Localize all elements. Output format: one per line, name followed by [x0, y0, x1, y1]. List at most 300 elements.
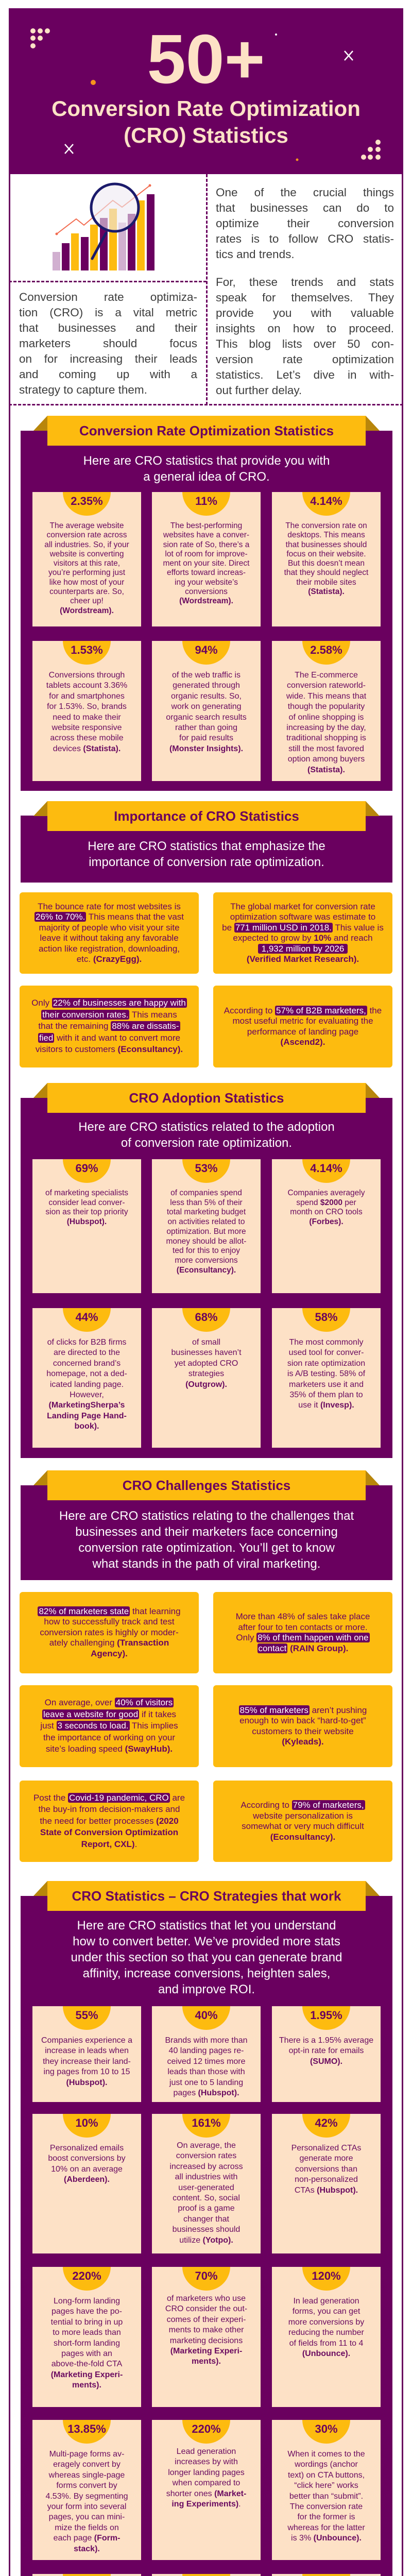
card 1.95%	[272, 2006, 381, 2102]
card 11%: lot of room for improve-	[165, 550, 248, 558]
card 82%: Agency).	[91, 1649, 128, 1658]
card 48%: after four to ten contacts or more.	[238, 1622, 368, 1632]
card 4.14%	[272, 492, 381, 626]
card 44%: homepage, not a ded-	[46, 1369, 127, 1378]
card covid: Report, CXL).	[81, 1839, 137, 1849]
card 55%: they increase their land-	[43, 2057, 131, 2066]
card 2.35%: cheer up!	[70, 597, 104, 605]
heading: Conversion Rate Optimization Statistics: Conversion Rate Optimization Statistics	[79, 423, 334, 438]
card 22% businesses: that the remaining 88% are dissatis-	[38, 1021, 179, 1031]
card 1.53%: across these mobile	[50, 734, 124, 742]
card 10%: boost conversions by	[48, 2154, 126, 2163]
card 220%: tential to bring in up	[51, 2318, 123, 2327]
card bounce rate: leave it without taking any favorable	[40, 933, 179, 943]
heading: Importance of CRO Statistics	[47, 801, 366, 831]
card 79%: website personalization is	[253, 1810, 353, 1821]
intro text right paragraph 2: version rate optimization	[216, 353, 394, 366]
card global market: optimization software was estimate to	[230, 912, 375, 922]
card 13.85%: forms convert by	[56, 2481, 117, 2490]
card 1.95%: 1.95%	[310, 2009, 342, 2022]
card 13.85%: mize the fields on	[55, 2523, 119, 2532]
card 10%: Personalized emails	[50, 2144, 124, 2153]
card 42%	[272, 2114, 381, 2253]
card 161%: proof is a game	[178, 2204, 235, 2213]
heading: CRO Adoption Statistics	[47, 1083, 366, 1113]
card 30%: 30%	[315, 2422, 338, 2435]
card 2.58%: of online shopping is	[289, 713, 364, 722]
card 220%: 220%	[192, 2422, 221, 2435]
card 1.95%: opt-in rate for emails	[289, 2046, 364, 2055]
card 11%: efforts toward increas-	[167, 568, 246, 577]
card 161%: utilize (Yotpo).	[179, 2236, 233, 2245]
card 1.95%: There is a 1.95% average	[279, 2036, 373, 2045]
card 220%: pages have the po-	[52, 2307, 122, 2316]
card 85%: customers to their website	[252, 1726, 354, 1736]
card 42%: 42%	[315, 2116, 338, 2129]
intro text right paragraph 2: statistics. Let’s dive in with-	[216, 368, 394, 381]
card 40%: leave a website for good if it takes	[43, 1709, 176, 1719]
card 58%	[272, 1308, 381, 1448]
card 58%: use it (Invesp).	[298, 1401, 354, 1410]
card 2.58%: increasing by the day,	[286, 723, 366, 732]
panel: strategies	[21, 1896, 392, 2576]
card 1.95%: (SUMO).	[310, 2057, 342, 2066]
intro text right paragraph 2: out further delay.	[216, 384, 302, 397]
card 2.35%: website is converting	[50, 550, 124, 558]
subtitle: Here are CRO statistics that provide you with	[83, 454, 330, 468]
illustration: bar chart with magnifier	[53, 182, 154, 270]
card 53%: (Econsultancy).	[177, 1266, 236, 1275]
card 120%: forms, you can get	[293, 2307, 360, 2316]
card 70%: CRO consider the out-	[165, 2304, 247, 2313]
card covid	[20, 1781, 199, 1862]
card 40%: the importance of working on your	[43, 1733, 175, 1742]
subtitle: under this section so that you can generate brand	[71, 1951, 342, 1964]
card 44%: book).	[74, 1422, 99, 1431]
card 44%: Landing Page Hand-	[47, 1412, 127, 1420]
panel: challenges	[21, 1485, 392, 1580]
subtitle: of conversion rate optimization.	[121, 1136, 292, 1150]
card 58%: is A/B testing. 58% of	[287, 1369, 365, 1378]
card 11%: (Wordstream).	[179, 597, 233, 605]
card 30%: “click here” works	[294, 2481, 358, 2490]
card 30%: better than “submit”.	[289, 2492, 363, 2501]
card global market: 1,932 million by 2026	[262, 944, 344, 953]
card 57% B2B: performance of landing page	[247, 1026, 358, 1037]
card 120%: (Unbounce).	[302, 2349, 350, 2358]
card 161%: 161%	[192, 2116, 221, 2129]
card 2.35%	[32, 492, 141, 626]
card 44%: (MarketingSherpa’s	[49, 1401, 125, 1410]
card 70%: (Marketing Experi-	[170, 2347, 242, 2355]
card 48%: Only 8% of them happen with one	[236, 1633, 369, 1642]
card 220%: increases by with	[175, 2458, 238, 2466]
card 4.14%	[272, 1159, 381, 1293]
card 4.14%: But this doesn’t mean	[288, 559, 365, 568]
card 40%: leads than those with	[167, 2067, 245, 2076]
card 13.85%: eragely convert by	[53, 2460, 121, 2469]
card 13.85%	[32, 2420, 141, 2560]
card 40%: pages (Hubspot).	[173, 2089, 239, 2097]
card 220%: above-the-fold CTA	[52, 2360, 122, 2368]
card 40%: site’s loading speed (SwayHub).	[46, 1744, 173, 1754]
card 94%: for paid results	[179, 734, 233, 742]
intro text right paragraph 1: rates is to follow CRO statis-	[216, 232, 394, 245]
card 4.14%: that they should neglect	[284, 568, 368, 577]
intro text right paragraph 2: speak for themselves. They	[216, 291, 394, 304]
card 22% businesses: Only 22% of businesses are happy with	[31, 998, 186, 1008]
card 220%: to more leads than	[53, 2328, 121, 2337]
card 94%: organic results. So,	[171, 692, 242, 701]
card 220%: (Marketing Experi-	[51, 2370, 123, 2379]
card 53%: total marketing budget	[167, 1208, 246, 1216]
card 70%: marketing decisions	[170, 2336, 243, 2345]
card 1.53%: for and smartphones	[49, 692, 125, 701]
card 53%: money should be allot-	[166, 1237, 246, 1246]
card 13.85%: 4.53%. By segmenting	[45, 2492, 128, 2501]
card 2.35%: all industries. So, if your	[44, 540, 129, 549]
subtitle	[88, 839, 325, 869]
card 58%: sion rate optimization	[287, 1359, 365, 1368]
title: (CRO) Statistics	[124, 123, 288, 147]
card 220%: pages with an	[61, 2349, 112, 2358]
card 2.35%: The average website	[50, 521, 124, 530]
card 220%: 220%	[72, 2269, 101, 2282]
card 2.58%: conversion rateworld-	[287, 681, 366, 690]
card 58%: 35% of them plan to	[289, 1391, 363, 1399]
title: Conversion Rate Optimization	[52, 96, 360, 121]
card 4.14%: The conversion rate on	[285, 521, 367, 530]
card 220%: ments).	[72, 2381, 101, 2389]
heading: Conversion Rate Optimization Statistics	[47, 416, 366, 446]
card 220%: shorter ones (Market-	[166, 2489, 246, 2498]
card covid: Post the Covid-19 pandemic, CRO are	[33, 1793, 185, 1803]
subtitle: how to convert better. We’ve provided more stats	[73, 1935, 340, 1948]
subtitle	[71, 1919, 342, 1996]
card 68%: yet adopted CRO	[175, 1359, 238, 1368]
card 4.14%: (Forbes).	[309, 1217, 344, 1226]
card global market: be 771 million USD in 2018. This value is	[222, 922, 384, 933]
card 1.53%: tablets account 3.36%	[46, 681, 127, 690]
card 11%: ing your website’s	[175, 578, 238, 587]
card 22% businesses: fied with it and want to convert more	[39, 1033, 180, 1043]
card 85%: enough to win back “hard-to-get”	[239, 1716, 366, 1725]
card 68%: 68%	[195, 1311, 218, 1324]
card 1.53%: for 1.53%. So, brands	[47, 702, 127, 711]
card 53%: ted for this to enjoy	[173, 1246, 240, 1255]
card 220%	[152, 2420, 261, 2560]
card 55%: 55%	[75, 2009, 98, 2022]
card 10%: (Aberdeen).	[64, 2175, 110, 2184]
card 220%: Long-form landing	[54, 2297, 120, 2306]
card 40%: just one to 5 landing	[169, 2078, 243, 2087]
card 22% businesses	[20, 986, 199, 1067]
card 120%: reducing the number	[288, 2328, 364, 2337]
subtitle: what stands in the path of viral marketing.	[93, 1557, 320, 1571]
card 30%: is 3% (Unbounce).	[291, 2534, 362, 2543]
intro text left: that businesses and their	[19, 321, 197, 334]
card 42%: Personalized CTAs	[291, 2144, 361, 2153]
subtitle	[59, 1509, 354, 1571]
card 48%: contact (RAIN Group).	[259, 1643, 348, 1653]
card 30%: The conversion rate	[290, 2502, 363, 2511]
subtitle: importance of conversion rate optimization.	[89, 855, 324, 869]
card 55%: increase in leads when	[45, 2046, 129, 2055]
card 13.85%: your form into several	[47, 2502, 126, 2511]
intro text right paragraph 2: This blog lists over 50 con-	[216, 337, 394, 350]
card 68%	[152, 1308, 261, 1448]
card 10%: 10% on an average	[51, 2165, 123, 2174]
card 69%: of marketing specialists	[45, 1189, 128, 1197]
card 53%: of companies spend	[170, 1189, 242, 1197]
card 55%	[32, 2006, 141, 2102]
card 58%: 58%	[315, 1311, 338, 1324]
card 120%: In lead generation	[293, 2297, 359, 2306]
card 30%: for the former is	[297, 2513, 355, 2521]
card 40%	[152, 2006, 261, 2102]
card 220%	[32, 2267, 141, 2407]
card covid: State of Conversion Optimization	[40, 1827, 178, 1837]
subtitle: a general idea of CRO.	[143, 470, 270, 484]
card bounce rate: 26% to 70%. This means that the vast	[36, 912, 184, 922]
card 2.35%: counterparts are. So,	[49, 587, 124, 596]
card 1.53%	[32, 641, 141, 781]
intro text left: on for increasing their leads	[19, 352, 197, 365]
intro text left: Conversion rate optimiza-	[19, 291, 197, 303]
card 44%	[32, 1308, 141, 1448]
card 82%: how to successfully track and test	[44, 1617, 175, 1626]
card 40%: ceived 12 times more	[167, 2057, 246, 2066]
card 53%: on activities related to	[168, 1217, 245, 1226]
card 11%: websites have a conver-	[163, 531, 249, 539]
card 85%: 85% of marketers aren’t pushing	[240, 1705, 367, 1715]
card 10%	[32, 2114, 141, 2253]
title	[52, 96, 360, 147]
card 44%: of clicks for B2B firms	[47, 1338, 126, 1347]
card global market: expected to grow by 10% and reach	[233, 933, 373, 943]
card 2.58%: wide. This means that	[286, 692, 366, 701]
intro text right paragraph 2: insights on how to proceed.	[216, 322, 394, 335]
card 5%	[32, 2574, 141, 2576]
card 44%: 44%	[75, 1311, 98, 1324]
card 68%: strategies	[188, 1369, 224, 1378]
card 13.85%: pages, you can mini-	[49, 2513, 125, 2521]
card bounce rate: action like registration, downloading,	[39, 944, 180, 953]
card 1.53%: website responsive	[52, 723, 122, 732]
card global market: The global market for conversion rate	[230, 902, 375, 911]
card 451%	[152, 2574, 261, 2576]
card bounce rate: The bounce rate for most websites is	[38, 902, 181, 911]
card 22% businesses: visitors to customers (Econsultancy).	[36, 1044, 183, 1054]
card 70%	[152, 2267, 261, 2407]
card 4.14%: focus on their website.	[286, 550, 366, 558]
intro text left: and coming up with a	[19, 368, 197, 381]
card global market: (Verified Market Research).	[247, 954, 359, 964]
card 94%	[152, 641, 261, 781]
panel: importance	[21, 816, 392, 883]
card 69%: sion as their top priority	[45, 1208, 128, 1216]
panel: adoption	[21, 1098, 392, 1458]
card 1.53%: need to make their	[53, 713, 121, 722]
subtitle	[78, 1120, 335, 1150]
card 53%: more conversions	[175, 1256, 238, 1265]
card 2.35%: conversion rate across	[47, 531, 127, 539]
card 82%	[20, 1592, 199, 1673]
big number 50+: 50+	[147, 20, 265, 98]
card 30%	[272, 2420, 381, 2560]
card 220%: short-form landing	[54, 2339, 120, 2348]
card 70%: ments).	[192, 2357, 221, 2366]
card 1.53%: Conversions through	[49, 671, 125, 680]
subtitle: affinity, increase conversions, heighten sales,	[83, 1967, 330, 1980]
heading: CRO Challenges Statistics: CRO Challenges Statistics	[123, 1478, 290, 1493]
card 40%: just 3 seconds to load. This implies	[40, 1721, 178, 1731]
intro text left	[19, 291, 197, 396]
card 161%	[152, 2114, 261, 2253]
card 68%: businesses haven’t	[171, 1348, 242, 1357]
card bounce rate: etc. (CrazyEgg).	[77, 954, 142, 964]
card 4.14%: spend $2000 per	[296, 1198, 356, 1207]
card 68%: (Outgrow).	[185, 1380, 227, 1389]
card 13.85%: stack).	[74, 2545, 100, 2553]
card 13.85%: each page (Form-	[54, 2534, 120, 2543]
card 120%: of fields from 11 to 4	[289, 2339, 363, 2348]
card 4.14%: 4.14%	[310, 495, 342, 507]
subtitle: Here are CRO statistics relating to the challenges that	[59, 1509, 354, 1523]
card 13.85%: 13.85%	[67, 2422, 106, 2435]
card 30%: wordings (anchor	[295, 2460, 358, 2469]
card 220%: when compared to	[173, 2479, 240, 2487]
card 30%: When it comes to the	[287, 2450, 365, 2459]
card 57% B2B: most useful metric for evaluating the	[232, 1016, 373, 1026]
card 2.58%: option among buyers	[288, 755, 365, 764]
card 48%: More than 48% of sales take place	[236, 1612, 370, 1621]
card 53%: less than 5% of their	[170, 1198, 243, 1207]
card 1.53%: 1.53%	[71, 643, 103, 656]
card 161%: user-generated	[178, 2183, 234, 2192]
card 85%	[213, 1685, 392, 1767]
intro dashed lines	[9, 281, 207, 282]
card 161%: increased by across	[169, 2162, 243, 2171]
subtitle: Here are CRO statistics that emphasize the	[88, 839, 325, 853]
card 120%	[272, 2267, 381, 2407]
card 2.58%: The E-commerce	[295, 671, 358, 680]
card 100%	[272, 2574, 381, 2576]
card 4.14%: Companies averagely	[288, 1189, 365, 1197]
card 79%: somewhat or very much difficult	[242, 1821, 364, 1831]
card 4.14%: that businesses should	[286, 540, 367, 549]
header banner	[9, 8, 403, 174]
card 70%: ments to make other	[169, 2326, 244, 2334]
card 161%: conversion rates	[176, 2151, 236, 2160]
card 94%: generated through	[173, 681, 240, 690]
card 44%: However,	[70, 1391, 104, 1399]
card 220%: ing Experiments).	[171, 2500, 241, 2509]
card 10%: 10%	[75, 2116, 98, 2129]
card 94%: 94%	[195, 643, 218, 656]
heading: CRO Strategies that work: CRO Statistics – CRO Strategies that work	[72, 1888, 341, 1904]
card 70%: of marketers who use	[167, 2294, 246, 2303]
card 42%: non-personalized	[295, 2175, 358, 2184]
card 11%	[152, 492, 261, 626]
card 11%: conversions	[185, 587, 228, 596]
card 120%: 120%	[312, 2269, 341, 2282]
intro text right paragraph 2	[216, 276, 394, 397]
card 85%: (Kyleads).	[282, 1737, 324, 1747]
intro text right paragraph 2: provide you with valuable	[216, 307, 394, 319]
card 161%: content. So, social	[173, 2194, 240, 2202]
card 48%	[213, 1592, 392, 1673]
panel: CRO statistics	[21, 431, 392, 791]
heading: CRO Challenges Statistics	[47, 1470, 366, 1500]
card 55%: Companies experience a	[41, 2036, 132, 2045]
heading: Importance of CRO Statistics: Importance of CRO Statistics	[114, 808, 299, 824]
card 94%: work on generating	[171, 702, 242, 711]
intro text right paragraph 1: optimize their conversion	[216, 217, 394, 230]
card 22% businesses: their conversion rates. This means	[42, 1010, 177, 1020]
heading: CRO Adoption Statistics: CRO Adoption Statistics	[129, 1090, 284, 1106]
card 2.58%: 2.58%	[310, 643, 342, 656]
card 4.14%: (Statista).	[308, 587, 345, 596]
heading: CRO Strategies that work	[47, 1881, 366, 1911]
card 11%: 11%	[195, 495, 217, 507]
card 30%: text) on CTA buttons,	[288, 2471, 365, 2480]
card 2.58%: though the popularity	[288, 702, 365, 711]
card 1.53%: devices (Statista).	[53, 744, 121, 753]
card 68%: of small	[192, 1338, 220, 1347]
card 2.35%: visitors at this rate,	[54, 559, 120, 568]
card 55%: ing pages from 10 to 15	[43, 2067, 130, 2076]
card 40%: Brands with more than	[165, 2036, 248, 2045]
card 161%: businesses should	[173, 2225, 240, 2234]
card 44%: icated landing page.	[50, 1380, 124, 1389]
card 70%: 70%	[195, 2269, 218, 2282]
card 44%: concerned brand’s	[53, 1359, 121, 1368]
card 79%: (Econsultancy).	[270, 1832, 335, 1841]
card 94%: of the web traffic is	[172, 671, 241, 680]
intro text left: tion (CRO) is a vital metric	[19, 306, 197, 319]
intro text right paragraph 1: that businesses can do to	[216, 201, 394, 214]
subtitle: and improve ROI.	[158, 1982, 255, 1996]
card 57% B2B: According to 57% of B2B marketers, the	[224, 1006, 382, 1015]
card 94%: organic search results	[166, 713, 247, 722]
card 42%: conversions than	[295, 2165, 357, 2174]
card 94%: rather than going	[175, 723, 237, 732]
subtitle: Here are CRO statistics that let you understand	[77, 1919, 336, 1933]
card 11%: ment on your site. Direct	[163, 559, 249, 568]
card 2.35%: (Wordstream).	[60, 606, 114, 615]
card 4.14%: month on CRO tools	[290, 1208, 363, 1216]
subtitle: conversion rate optimization. You’ll get to know	[78, 1541, 335, 1555]
card 2.58%: traditional shopping is	[286, 734, 366, 742]
card covid: the need for better processes (2020	[40, 1816, 179, 1826]
card bounce rate	[20, 892, 199, 974]
subtitle: businesses and their marketers face concerning	[75, 1525, 338, 1539]
card 220%: longer landing pages	[168, 2468, 245, 2477]
card 40%: On average, over 40% of visitors	[45, 1698, 173, 1707]
card 120%: more conversions by	[288, 2318, 364, 2327]
card 94%: (Monster Insights).	[169, 744, 243, 753]
card 82%: 82% of marketers state that learning	[39, 1606, 181, 1616]
card 58%: The most commonly	[289, 1338, 364, 1347]
card 82%: conversion rates is highly or moder-	[40, 1628, 179, 1637]
card 4.14%: desktops. This means	[287, 531, 365, 539]
intro text left: strategy to capture them.	[19, 383, 147, 396]
card 42%: generate more	[299, 2154, 353, 2163]
card 53%	[152, 1159, 261, 1293]
card 70%: comes of their experi-	[167, 2315, 246, 2324]
card 11%: The best-performing	[170, 521, 242, 530]
